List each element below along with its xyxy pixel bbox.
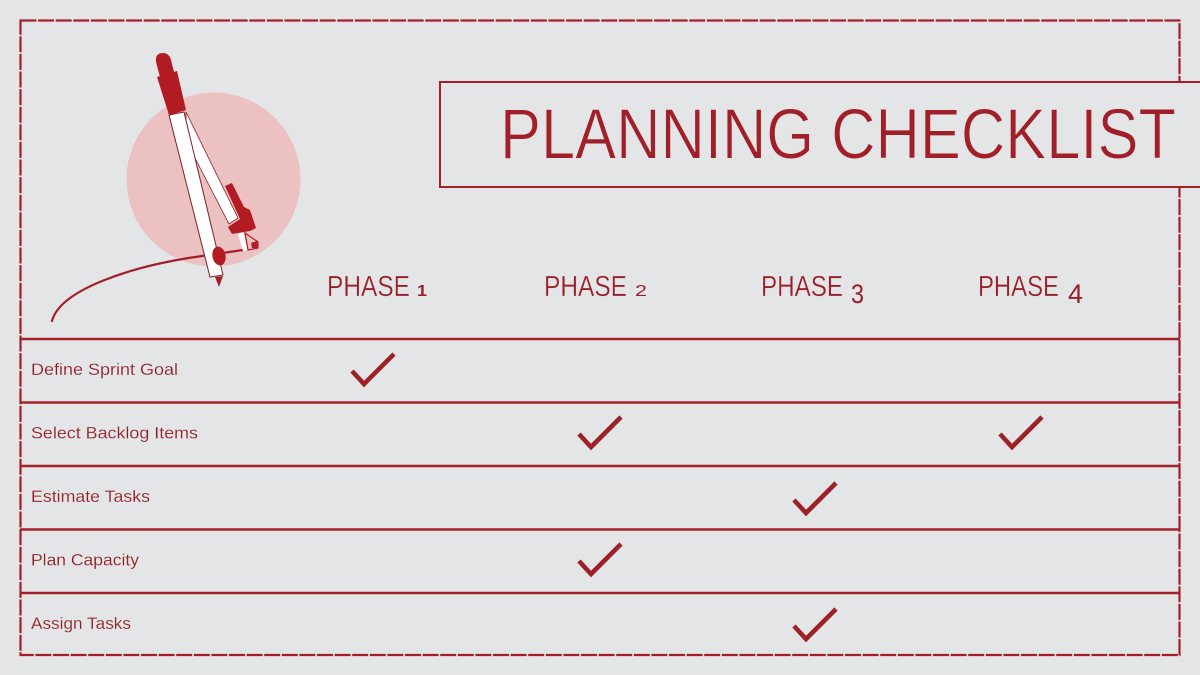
check: select backlog items, phase 4 xyxy=(1000,417,1042,447)
phase 3: 3 xyxy=(851,279,864,309)
row label: estimate tasks: Estimate Tasks xyxy=(31,488,150,506)
check: plan capacity, phase 2 xyxy=(579,544,621,574)
row lines xyxy=(20,339,1180,593)
check: select backlog items, phase 2 xyxy=(579,417,621,447)
row label: define sprint goal: Define Sprint Goal xyxy=(31,361,178,379)
pencil holder xyxy=(225,183,256,234)
icon: drawing compass xyxy=(52,53,300,321)
right leg xyxy=(186,112,238,224)
row label: assign tasks: Assign Tasks xyxy=(31,615,131,633)
title box xyxy=(440,82,1200,187)
pencil lead outline xyxy=(245,233,258,250)
check: estimate tasks, phase 3 xyxy=(794,483,836,513)
check: assign tasks, phase 3 xyxy=(794,609,836,639)
handle xyxy=(156,53,186,115)
pencil tip xyxy=(238,232,248,251)
phase 4: PHASE xyxy=(978,271,1059,303)
left leg xyxy=(169,112,223,277)
check: define sprint goal, phase 1 xyxy=(352,354,394,384)
row label: select backlog items: Select Backlog Items xyxy=(31,424,198,442)
phase 4: 4 xyxy=(1068,279,1083,309)
phase headers xyxy=(327,271,1083,309)
phase 1: 1 xyxy=(417,283,427,300)
table rows xyxy=(20,339,1180,633)
circle backdrop xyxy=(126,92,300,266)
row label: plan capacity: Plan Capacity xyxy=(31,552,140,570)
phase 3: PHASE xyxy=(761,271,843,303)
phase 2: PHASE xyxy=(544,271,627,303)
lead point xyxy=(251,241,258,248)
phase 2: 2 xyxy=(635,283,647,300)
needle tip xyxy=(215,276,223,287)
phase 1: PHASE xyxy=(327,271,410,303)
hinge xyxy=(211,245,227,267)
drawn arc xyxy=(52,250,243,321)
